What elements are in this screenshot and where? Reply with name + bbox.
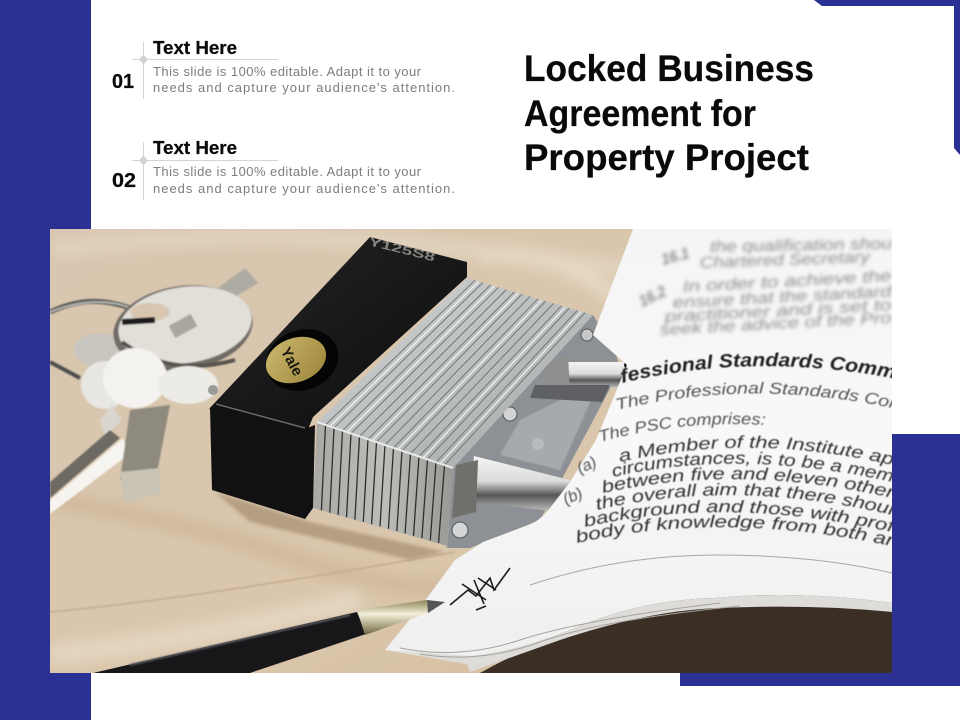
blurred upper paragraphs: seek the advice of the Pro [659, 310, 892, 339]
document body copy: (a) [575, 454, 599, 478]
item 01 number: 01 [112, 71, 134, 93]
bottom-right blue panel [680, 434, 960, 686]
document body copy: a Member of the Institute ap [619, 434, 892, 467]
title [524, 48, 814, 178]
item 01 [112, 38, 455, 99]
signature [450, 568, 510, 610]
document body copy: (b) [561, 485, 585, 509]
upper shackle [530, 362, 627, 402]
lock serial number: Y125S8 [367, 234, 437, 264]
blurred upper paragraphs: In order to achieve the [682, 268, 892, 296]
title: Property Project [524, 137, 809, 178]
lower shackle [470, 456, 570, 512]
wood grain [50, 238, 637, 655]
section heading: fessional Standards Comm [620, 352, 892, 384]
top-right blue corner bracket [814, 0, 960, 155]
open document [385, 229, 892, 673]
item 01 body: needs and capture your audience's attention. [153, 80, 455, 95]
title: Agreement for [524, 93, 756, 134]
brass Yale badge: Yale [277, 345, 306, 379]
blurred upper paragraphs: the qualification shou [710, 236, 892, 256]
document body copy: The Professional Standards Cor [616, 381, 892, 410]
document body copy: The PSC comprises: [598, 412, 766, 442]
brass Yale badge [266, 329, 338, 391]
item 02 number: 02 [112, 170, 136, 192]
lock shadow [215, 492, 445, 560]
blurred upper paragraphs: Chartered Secretary [700, 249, 871, 272]
item 02 heading: Text Here [153, 138, 237, 158]
page margin line [530, 555, 892, 585]
photo: padlock, keys, pen and document on wooden table [50, 229, 892, 673]
blurred upper paragraphs: ensure that the standard [672, 283, 893, 312]
blurred upper paragraphs [637, 236, 893, 339]
item 02 body: This slide is 100% editable. Adapt it to your [153, 164, 422, 179]
blurred upper paragraphs: practitioner and is set to [663, 297, 892, 326]
item 02 [112, 138, 455, 200]
document body copy: between five and eleven other [602, 466, 892, 498]
document body copy [564, 381, 892, 546]
rivets [503, 407, 517, 421]
title: Locked Business [524, 48, 814, 89]
item 01 body [153, 64, 455, 95]
document body copy: circumstances, is to be a mem [612, 451, 892, 482]
document body copy: the overall aim that there shoul [596, 482, 892, 516]
black lock body [208, 234, 467, 519]
blurred upper paragraphs: 16.2 [637, 283, 669, 311]
interior metal behind lock plates [447, 315, 620, 548]
left blue panel [0, 0, 91, 720]
silver plates: top face [317, 278, 593, 468]
item 02 body: needs and capture your audience's attention. [153, 181, 455, 196]
item 01 body: This slide is 100% editable. Adapt it to your [153, 64, 422, 79]
document body copy: background and those with prof [584, 499, 892, 532]
item 02 body [153, 164, 455, 196]
document body copy: body of knowledge from both ar [576, 514, 892, 546]
pen [93, 600, 445, 673]
silver plates: front face [313, 422, 453, 546]
item 02 marker [139, 156, 148, 166]
item 01 heading: Text Here [153, 38, 237, 58]
blurred upper paragraphs: 16.1 [660, 245, 691, 269]
keys [50, 268, 258, 514]
item 01 marker [139, 54, 148, 64]
